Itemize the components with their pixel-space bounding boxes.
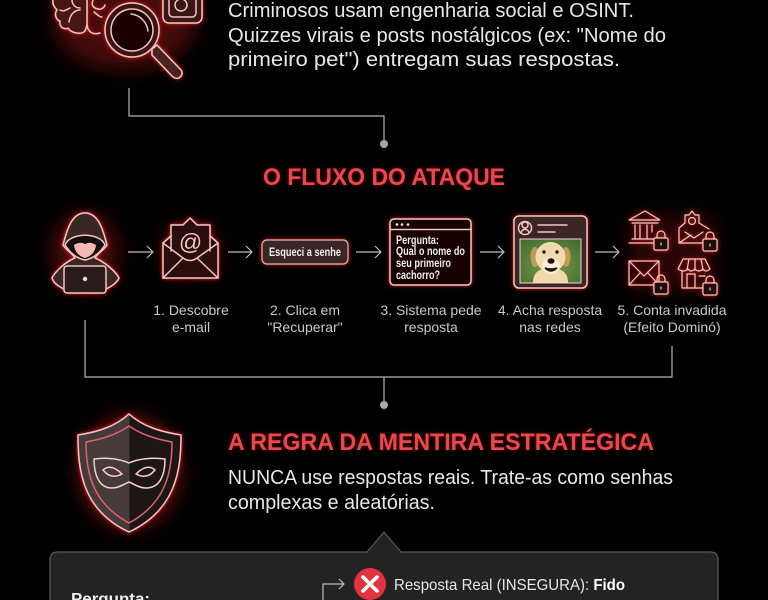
arrow: [128, 246, 153, 258]
insecure answer: Resposta Real (INSEGURA): Fido: [394, 577, 625, 594]
text: how criminals get answers: Quizzes virais e posts nostálgicos (ex: "Nome do: [228, 25, 666, 47]
text: how criminals get answers: primeiro pet") entregam suas respostas.: [228, 49, 620, 71]
step labels: "Recuperar": [267, 319, 343, 335]
icon: brain, magnifier and social media: [53, 0, 202, 78]
icon: locked email: [679, 211, 709, 243]
step labels: e-mail: [172, 319, 210, 335]
heading: attack flow: O FLUXO DO ATAQUE: [263, 164, 505, 191]
text: how criminals get answers: Criminosos usam engenharia social e OSINT.: [228, 0, 634, 22]
window: security question: [390, 219, 471, 285]
icon: envelope with at sign: @: [179, 229, 202, 255]
step labels: (Efeito Dominó): [623, 319, 721, 335]
step labels: 2. Clica em: [270, 302, 340, 318]
connector: top section to attack flow: [129, 88, 388, 148]
step labels: 1. Descobre: [153, 302, 229, 318]
step labels: 5. Conta invadida: [618, 302, 727, 318]
icon: shield with mask: [78, 414, 182, 532]
connector: attack flow to rule: [85, 320, 672, 409]
step labels: 3. Sistema pede: [380, 302, 482, 318]
icon: envelope with at sign: [163, 218, 218, 278]
text: how criminals get answers: [228, 0, 666, 71]
step labels: [153, 302, 727, 335]
arrow: [228, 246, 252, 258]
heading: the strategic lie rule: A REGRA DA MENTIRA ESTRATÉGICA: [228, 428, 654, 456]
step labels: nas redes: [519, 319, 581, 335]
button: forgot password: Esqueci a senhe: [269, 247, 341, 259]
icon: hooded hacker with laptop: [51, 212, 119, 293]
text: rule explanation: [228, 467, 673, 514]
window: security question: seu primeiro: [396, 256, 451, 270]
icons: compromised accounts with locks: [629, 211, 717, 295]
photo: golden dog: [520, 239, 581, 283]
text: rule explanation: NUNCA use respostas reais. Trate-as como senhas: [228, 467, 673, 489]
icon: red x: [354, 568, 386, 600]
window: security question: cachorro?: [396, 268, 440, 282]
arrow: [356, 246, 381, 258]
arrow: to insecure answer: [323, 579, 344, 600]
text: rule explanation: complexas e aleatórias.: [228, 492, 435, 514]
arrow: [595, 246, 619, 258]
window: security question: Qual o nome do: [396, 244, 465, 258]
icon: envelope: [629, 261, 659, 285]
icon: bank: [629, 211, 660, 243]
window: security question: Pergunta:: [396, 233, 439, 247]
social post with dog photo: [514, 216, 587, 288]
icon: storefront: [678, 259, 710, 288]
step labels: resposta: [404, 319, 458, 335]
locks: [654, 238, 668, 250]
mask: [94, 458, 165, 488]
panel: example question: [50, 532, 718, 600]
button: forgot password: [262, 240, 348, 264]
arrow: [480, 246, 504, 258]
step labels: 4. Acha resposta: [498, 302, 602, 318]
